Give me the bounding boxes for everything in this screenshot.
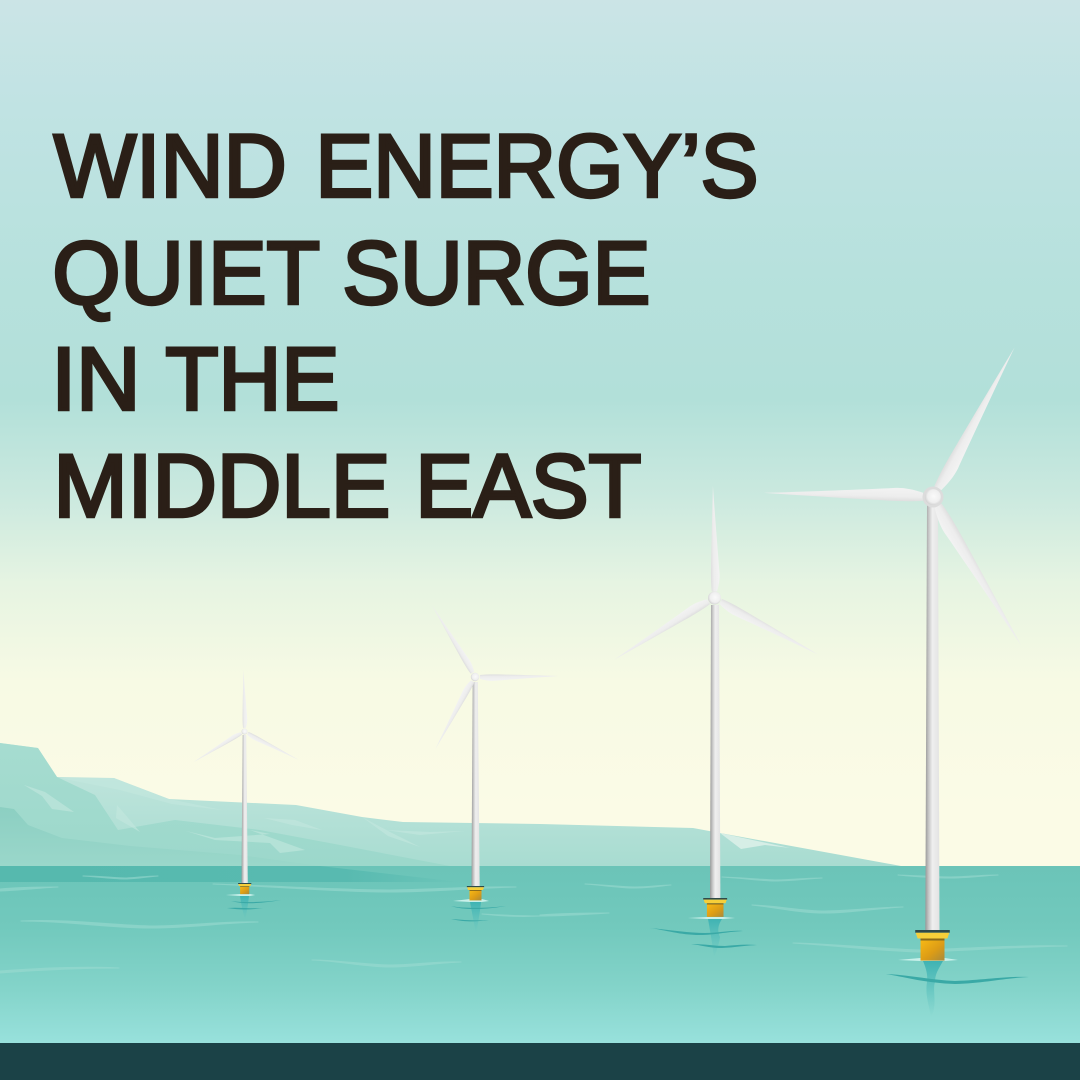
tower xyxy=(710,605,720,898)
title: MIDDLE xyxy=(53,436,390,536)
wave highlights xyxy=(0,875,1067,973)
turbine 3 xyxy=(612,486,820,958)
reflection xyxy=(470,902,481,933)
rotor xyxy=(612,486,820,662)
rotor xyxy=(430,603,559,751)
foundation xyxy=(915,930,950,961)
water surface xyxy=(0,866,1080,1043)
rotor xyxy=(764,345,1025,650)
title: QUIET xyxy=(52,222,319,322)
foam xyxy=(453,899,489,902)
turbine 1, smallest xyxy=(192,670,300,920)
title: ENERGY’S xyxy=(315,116,758,216)
sea xyxy=(0,866,1080,1043)
ripples xyxy=(451,906,506,921)
tower xyxy=(472,682,480,886)
dark water band at horizon xyxy=(0,866,460,882)
reflection xyxy=(923,961,943,1017)
title xyxy=(51,116,758,536)
foundation xyxy=(238,883,251,894)
reflection xyxy=(708,919,722,958)
foam xyxy=(898,958,958,961)
pale far headland xyxy=(720,833,790,849)
title: WIND xyxy=(54,116,287,216)
ripples xyxy=(886,974,1029,984)
title: THE xyxy=(165,328,339,428)
title: EAST xyxy=(415,436,641,536)
title: IN xyxy=(51,328,140,428)
turbine 4, largest xyxy=(764,345,1029,1017)
turbine 2 xyxy=(430,603,559,933)
foundation xyxy=(703,898,727,917)
title: SURGE xyxy=(342,222,650,322)
distant coastline xyxy=(0,743,901,866)
near hills xyxy=(0,807,320,866)
middle hills xyxy=(0,743,450,866)
tower xyxy=(925,505,940,930)
ripples xyxy=(650,928,757,948)
cliff highlights xyxy=(24,778,465,853)
rotor xyxy=(192,670,300,763)
ripples xyxy=(227,900,281,910)
tower xyxy=(242,735,248,883)
reflection xyxy=(240,896,249,920)
foam xyxy=(226,894,255,896)
far hills xyxy=(0,743,901,866)
footer bar xyxy=(0,1043,1080,1080)
foam xyxy=(688,917,735,919)
foundation xyxy=(467,886,484,900)
